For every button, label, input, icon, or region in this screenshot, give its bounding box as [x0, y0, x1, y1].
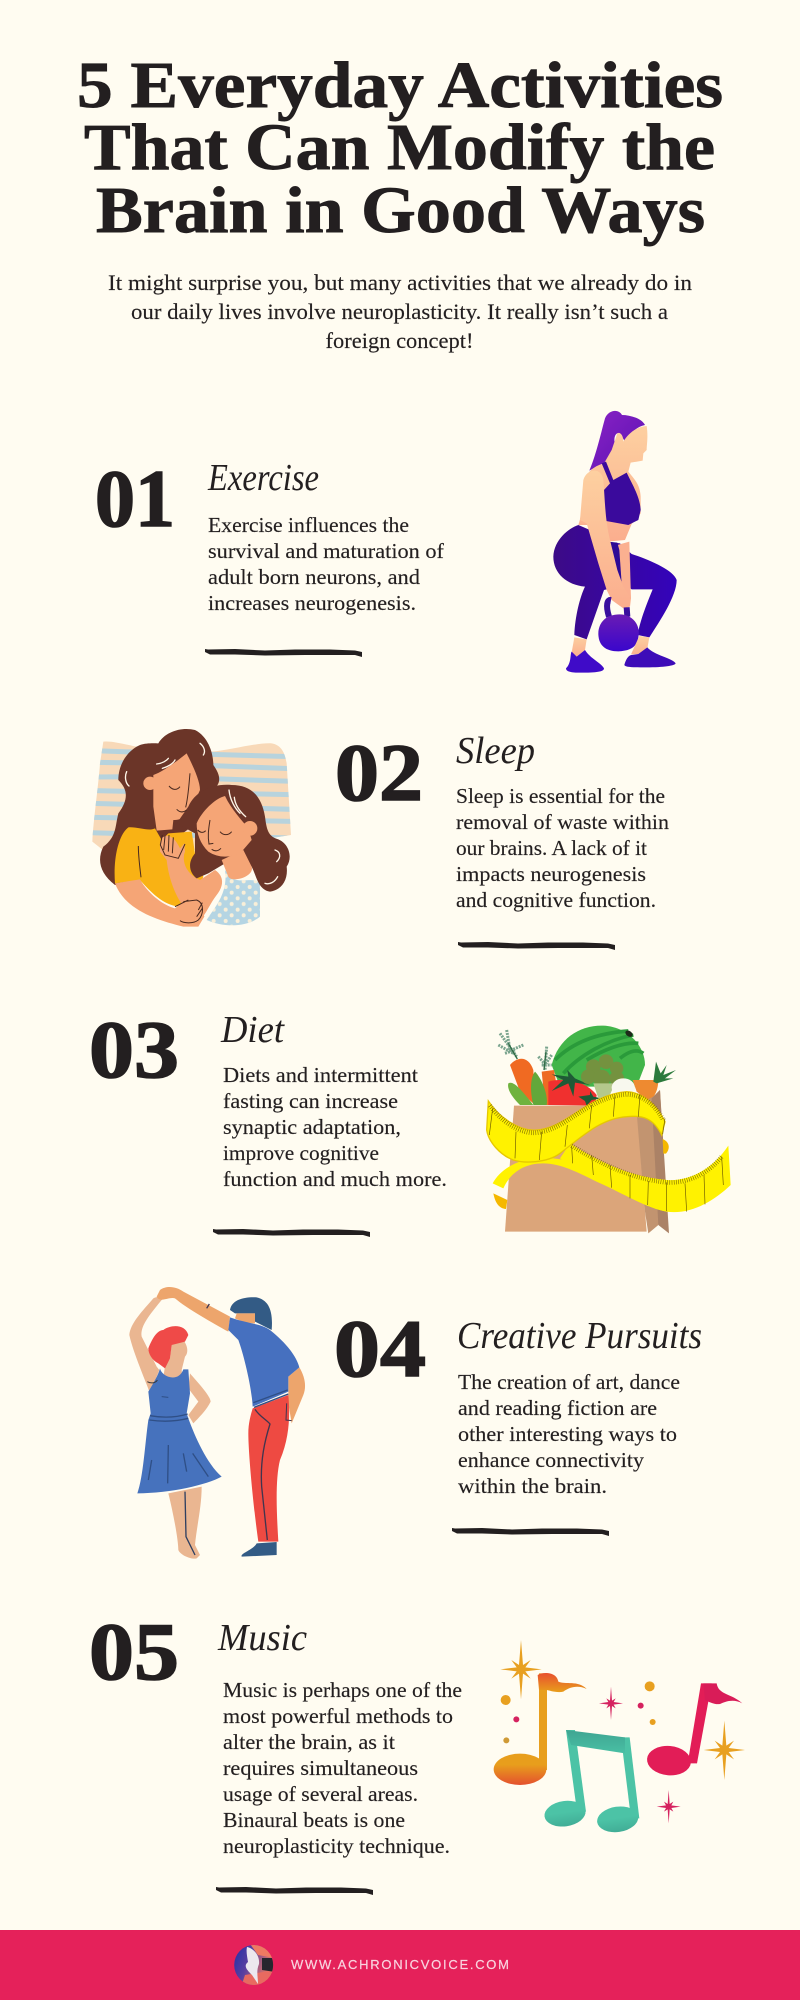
text: music description	[223, 1678, 462, 1858]
text: creative pursuits description: within the brain.	[458, 1474, 607, 1498]
text: creative pursuits description	[458, 1370, 680, 1498]
panel: 03 diet	[89, 1004, 731, 1237]
text: exercise description: increases neurogenesis.	[208, 591, 416, 615]
number 01: 01	[95, 453, 175, 544]
text: diet description: fasting can increase	[223, 1089, 398, 1113]
text: music description: usage of several areas.	[223, 1782, 418, 1806]
heading: music: Music	[217, 1617, 307, 1659]
text: diet description	[223, 1063, 447, 1191]
text: creative pursuits description: and reading fiction are	[458, 1396, 657, 1420]
icon: mother and daughter sleeping	[88, 729, 292, 927]
panel: 04 creative pursuits	[129, 1287, 702, 1559]
text: exercise description	[208, 513, 444, 615]
number 04: 04	[334, 1303, 426, 1394]
icon: music notes and stars	[494, 1640, 745, 1835]
text: diet description: improve cognitive	[223, 1141, 379, 1165]
text: diet description: function and much more.	[223, 1167, 447, 1191]
title: Brain in Good Ways	[96, 174, 705, 247]
heading: creative pursuits: Creative Pursuits	[457, 1315, 702, 1357]
text: exercise description: Exercise influences the	[208, 513, 409, 537]
text: exercise description: adult born neurons, and	[208, 565, 421, 589]
title	[77, 49, 723, 247]
intro text: It might surprise you, but many activities that we already do in	[108, 270, 692, 295]
text: music description: Music is perhaps one of the	[223, 1678, 462, 1702]
icon: dancing couple	[129, 1287, 305, 1559]
text: music description: requires simultaneous	[223, 1756, 418, 1780]
text: music description: most powerful methods to	[223, 1704, 453, 1728]
text: diet description: Diets and intermittent	[223, 1063, 418, 1087]
text: sleep description: impacts neurogenesis	[456, 862, 646, 886]
title: That Can Modify the	[84, 111, 715, 184]
intro text: foreign concept!	[326, 328, 474, 353]
heading: exercise: Exercise	[207, 457, 319, 499]
icon: logo badge	[234, 1945, 274, 1985]
footer band	[0, 1930, 800, 2000]
title: 5 Everyday Activities	[77, 49, 723, 122]
text: sleep description: our brains. A lack of it	[456, 836, 647, 860]
text: creative pursuits description: enhance connectivity	[458, 1448, 645, 1472]
number 03: 03	[89, 1004, 179, 1095]
text: creative pursuits description: other interesting ways to	[458, 1422, 677, 1446]
panel: 02 sleep	[88, 727, 670, 950]
text: sleep description: removal of waste within	[456, 810, 670, 834]
text: creative pursuits description: The creation of art, dance	[458, 1370, 680, 1394]
text: music description: Binaural beats is one	[223, 1808, 405, 1832]
text: sleep description	[456, 784, 670, 912]
panel: 01 exercise	[95, 411, 677, 673]
text: music description: neuroplasticity technique.	[223, 1834, 450, 1858]
text: music description: alter the brain, as it	[223, 1730, 395, 1754]
heading: diet: Diet	[220, 1009, 285, 1051]
text: sleep description: Sleep is essential for the	[456, 784, 665, 808]
intro text: our daily lives involve neuroplasticity. It really isn’t such a	[131, 299, 668, 324]
panel: 05 music	[89, 1606, 745, 1895]
footer website text: WWW.ACHRONICVOICE.COM	[291, 1957, 509, 1972]
heading: sleep: Sleep	[456, 730, 535, 772]
text: diet description: synaptic adaptation,	[223, 1115, 401, 1139]
intro text	[108, 270, 692, 353]
text: exercise description: survival and maturation of	[208, 539, 444, 563]
text: sleep description: and cognitive function.	[456, 888, 656, 912]
number 05: 05	[89, 1606, 179, 1697]
icon: woman lifting kettlebell	[553, 411, 677, 673]
number 02: 02	[335, 727, 423, 818]
icon: grocery bag with measuring tape	[487, 1026, 731, 1233]
